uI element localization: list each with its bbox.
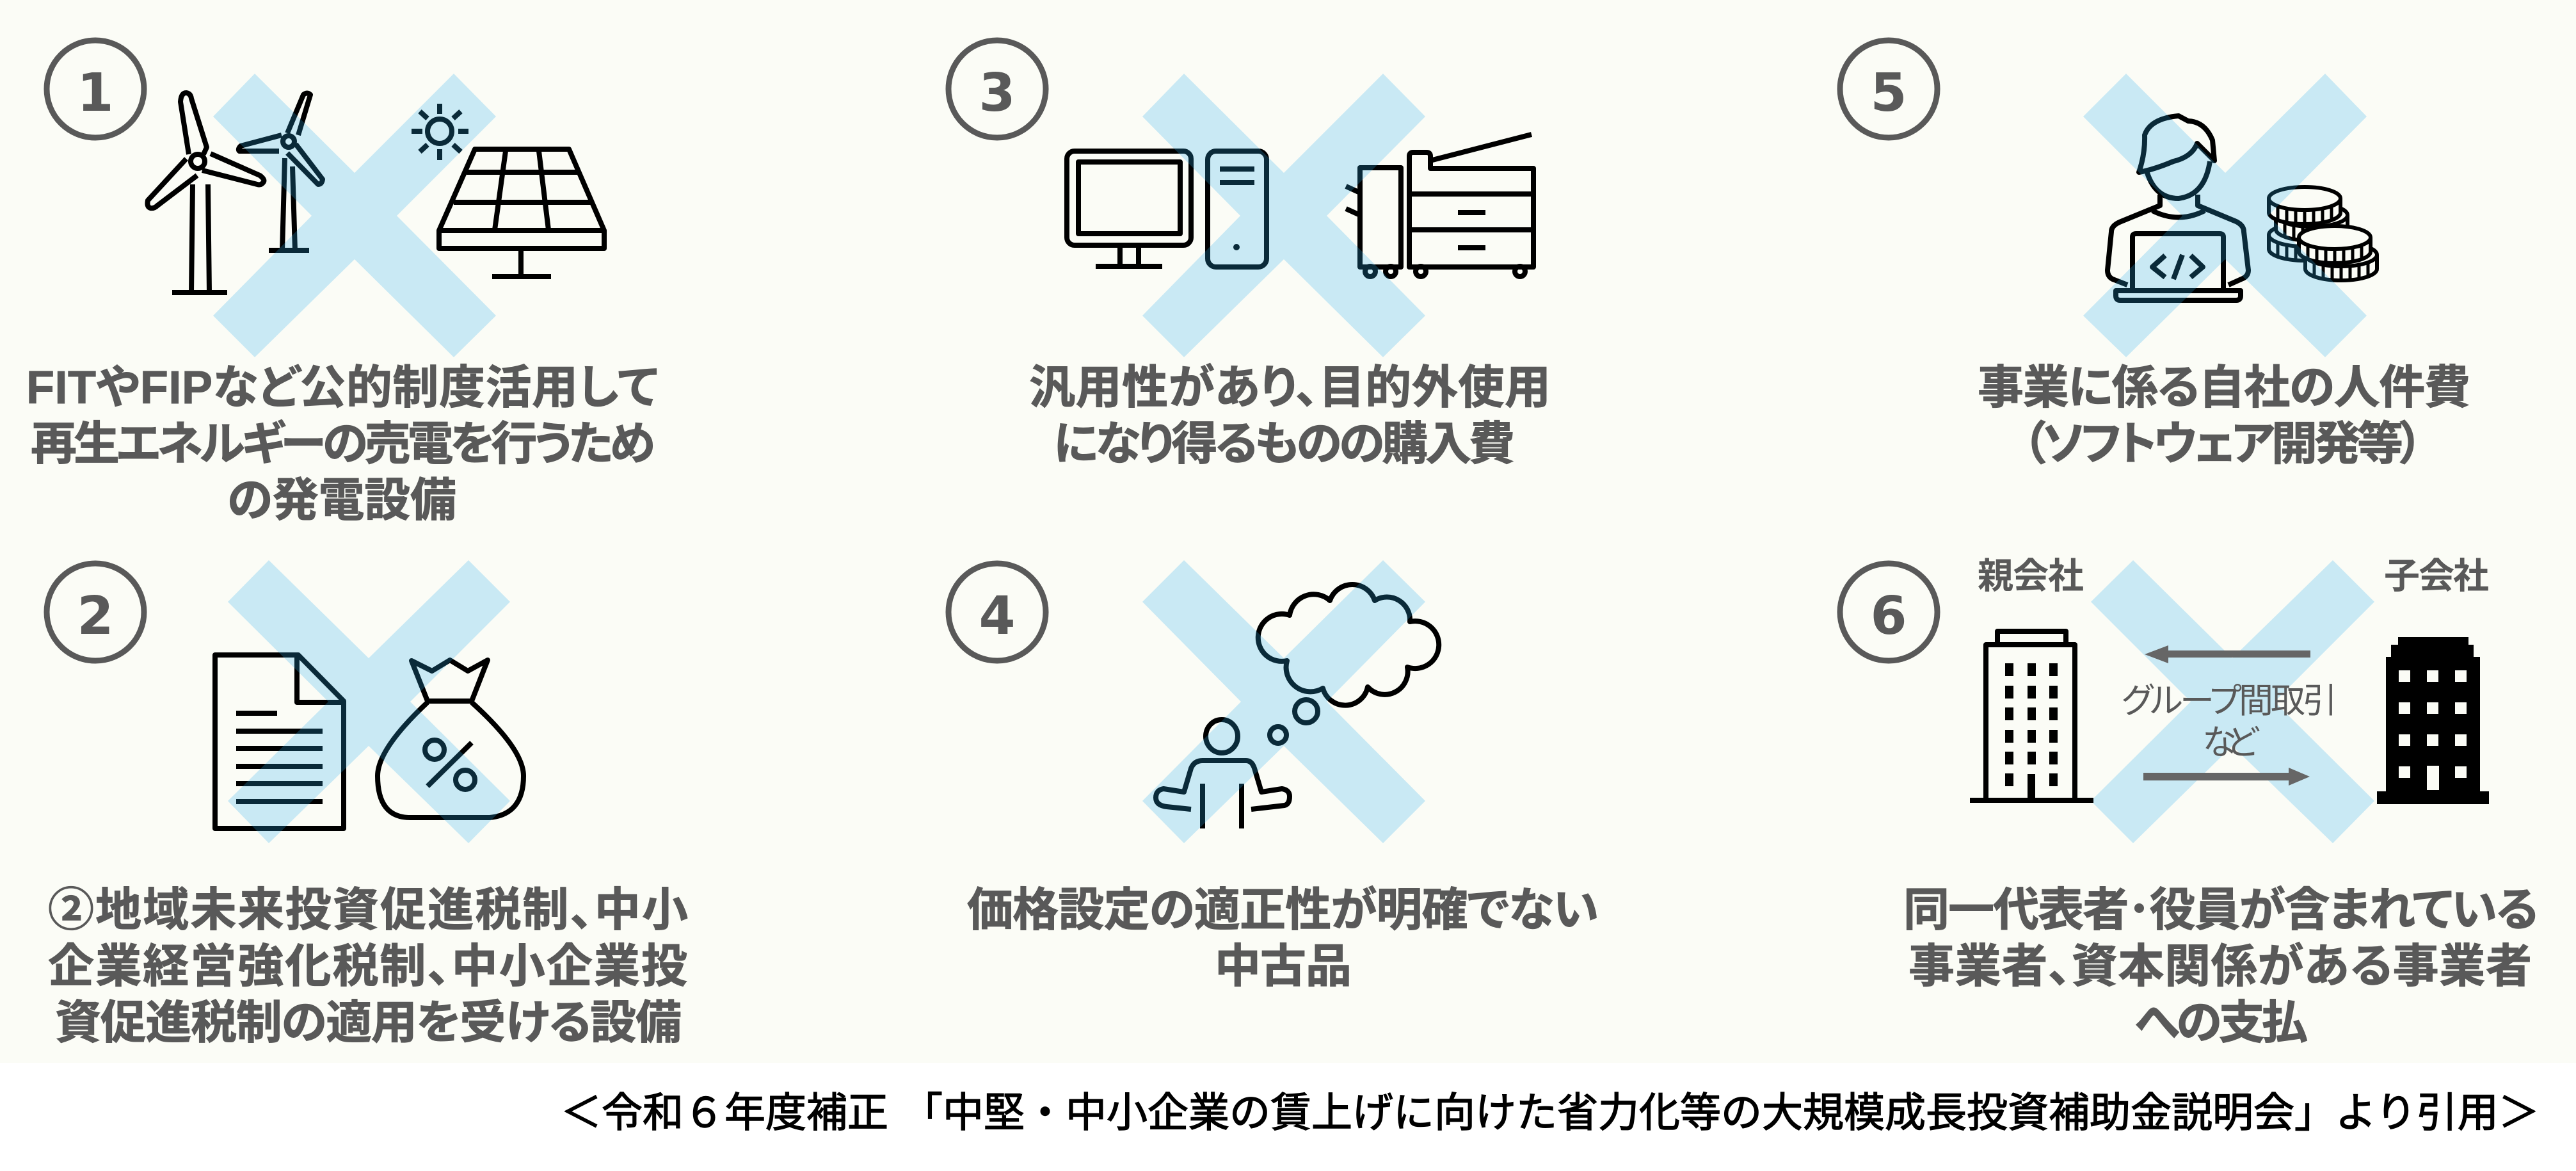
description 3: になり得るものの購入費 [1053,419,1515,470]
description 5: （ソフトウェア開発等） [2022,419,2423,470]
description 4: 中古品 [1215,941,1352,992]
badge 3 [948,40,1046,138]
arrow: subsidiary to parent [2145,645,2310,663]
badge 5 [1840,40,1937,138]
badge 3: 3 [979,63,1016,124]
description 5 [1978,362,2470,470]
panel 5: in-house labour costs [1840,40,2470,470]
icon: subsidiary building [2377,637,2489,804]
label: group transactions: グループ間取引 [2122,682,2337,720]
badge 4 [948,563,1046,661]
icon: coins [2269,187,2377,280]
cross mark 3 [1142,74,1425,357]
description 4: 価格設定の適正性が明確でない [967,885,1599,936]
description 3 [1029,362,1551,470]
description 2 [48,885,688,1049]
panel 4: second-hand goods [948,560,1599,992]
icon: wind turbines and solar panel [147,93,604,293]
arrow: parent to subsidiary [2143,768,2310,786]
badge 1 [47,40,144,138]
panel 3: general-purpose goods [948,40,1551,470]
description 6: 事業者、資本関係がある事業者 [1908,941,2532,992]
icon: developer with laptop [2108,116,2248,300]
description 4 [967,885,1599,992]
description 1 [26,362,658,526]
cross mark 6 [2091,560,2374,843]
cross mark 4 [1142,560,1425,843]
description 2: 企業経営強化税制、中小企業投 [48,941,687,992]
icon: parent company building [1970,631,2093,800]
description 1: 再生エネルギーの売電を行うため [31,419,655,470]
icon: document and money bag [215,655,524,828]
description 3: 汎用性があり、目的外使用 [1029,362,1551,414]
source citation footer: ＜令和６年度補正 [561,1090,888,1136]
label: group transactions [2122,682,2337,762]
description 2: ②地域未来投資促進税制、中小 [48,885,688,936]
icon: computer and copier [1067,134,1533,277]
source citation footer: 「中堅・中小企業の賃上げに向けた省力化等の大規模成長投資補助金説明会」より引用＞ [902,1090,2540,1136]
badge 2 [47,563,144,661]
label: subsidiary: 子会社 [2384,556,2489,596]
panel 2: tax incentive equipment [47,560,688,1049]
description 2: 資促進税制の適用を受ける設備 [55,997,682,1049]
badge 2: 2 [77,586,114,647]
badge 6: 6 [1870,586,1907,647]
description 6: 同一代表者･役員が含まれている [1903,885,2538,936]
panel 1: power generation equipment [26,40,658,526]
badge 1: 1 [77,63,114,124]
cross mark 2 [228,560,510,843]
description 5: 事業に係る自社の人件費 [1978,362,2470,414]
description 6 [1903,885,2538,1049]
panel 6: group transactions [1840,556,2538,1049]
badge 4: 4 [979,586,1016,647]
badge 5: 5 [1870,63,1907,124]
description 1: FITやFIPなど公的制度活用して [26,362,658,414]
description 1: の発電設備 [227,475,456,526]
label: parent company: 親会社 [1978,556,2084,596]
cross mark 5 [2083,74,2367,357]
icon: thinking person [1156,585,1439,828]
badge 6 [1840,563,1937,661]
label: group transactions: など [2202,723,2260,762]
cross mark 1 [213,74,496,357]
description 6: への支払 [2134,997,2308,1049]
